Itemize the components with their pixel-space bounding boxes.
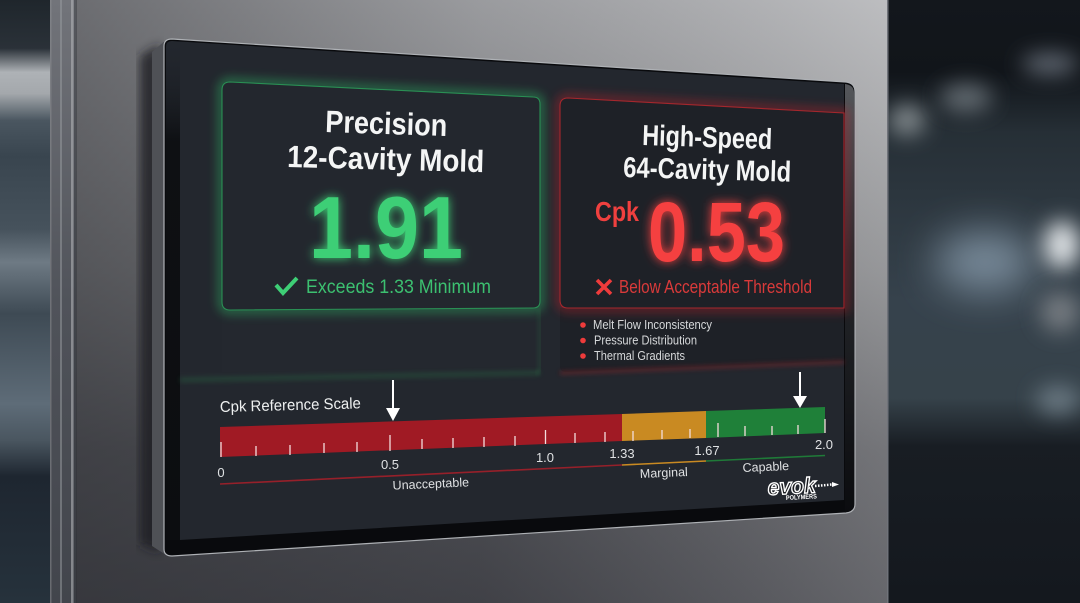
bar segment: marginal bbox=[622, 411, 706, 441]
background: blurred factory left bbox=[0, 0, 50, 603]
green glow strip bbox=[180, 373, 540, 380]
chart: cpk reference scale bbox=[217, 372, 833, 493]
monitor frame bbox=[152, 39, 855, 556]
arrow: 1.91 marker bbox=[793, 372, 807, 408]
zone labels bbox=[392, 459, 789, 493]
scale title: Cpk Reference Scale bbox=[220, 395, 361, 416]
logo: evok polymers: evok bbox=[767, 472, 818, 500]
heading: high-speed: High-Speed bbox=[642, 120, 773, 156]
heading: 12-cavity mold: 12-Cavity Mold bbox=[287, 139, 485, 179]
background: blurred factory right bbox=[888, 43, 1080, 442]
axis labels: 0 bbox=[217, 465, 225, 480]
cause 1: melt flow: Melt Flow Inconsistency bbox=[593, 318, 713, 332]
tick marks bbox=[221, 419, 825, 457]
screen bbox=[166, 41, 844, 540]
panel: 64-cavity lower extension with causes bbox=[560, 308, 844, 373]
axis labels: 0.5 bbox=[381, 457, 399, 472]
heading: 64-cavity mold: 64-Cavity Mold bbox=[623, 152, 792, 189]
value: 0.53: 0.53 bbox=[648, 185, 785, 279]
axis labels: 1.67 bbox=[694, 443, 720, 458]
cause 2: pressure: Pressure Distribution bbox=[594, 334, 697, 348]
zone labels: Unacceptable bbox=[392, 475, 469, 493]
zone labels: Marginal bbox=[640, 465, 688, 481]
bar segment: capable bbox=[706, 407, 825, 438]
label: Cpk: Cpk bbox=[595, 196, 639, 227]
icon: check mark bbox=[276, 278, 297, 293]
zone line: capable bbox=[706, 456, 825, 461]
monitor shadow bbox=[140, 44, 160, 552]
logo: evok polymers bbox=[767, 472, 839, 502]
panel: high-speed 64-cavity mold bbox=[560, 98, 844, 308]
arrow: 0.53 marker bbox=[386, 380, 400, 421]
axis labels: 2.0 bbox=[815, 437, 833, 452]
cause 3: thermal: Thermal Gradients bbox=[594, 349, 685, 363]
heading: precision: Precision bbox=[325, 104, 448, 143]
value: 1.91: 1.91 bbox=[309, 178, 463, 277]
logo: evok polymers: POLYMERS bbox=[786, 493, 818, 502]
status: exceeds minimum: Exceeds 1.33 Minimum bbox=[306, 277, 491, 298]
status: below threshold: Below Acceptable Threshold bbox=[619, 277, 812, 297]
axis labels: 1.0 bbox=[536, 450, 554, 465]
axis labels: 1.33 bbox=[609, 446, 635, 461]
icon: x mark bbox=[597, 280, 611, 294]
zone line: unacceptable bbox=[220, 465, 622, 484]
brushed steel wall panel bbox=[50, 0, 888, 603]
axis labels bbox=[217, 437, 833, 480]
zone line: marginal bbox=[622, 461, 706, 465]
zone labels: Capable bbox=[742, 459, 789, 475]
bar segment: unacceptable bbox=[220, 414, 622, 457]
panel: 12-cavity lower extension bbox=[180, 308, 540, 380]
panel: precision 12-cavity mold bbox=[222, 82, 540, 310]
